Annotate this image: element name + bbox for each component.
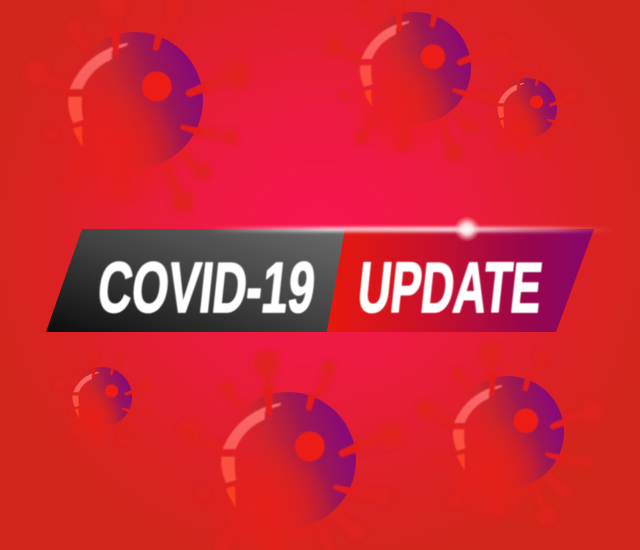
light streak: [205, 227, 615, 232]
virus: bottom right: [417, 341, 603, 527]
virus: small lower left: [53, 348, 153, 448]
virus: top centre-right: [324, 0, 510, 163]
virus: small top right: [478, 59, 578, 159]
lens flare: [454, 216, 480, 242]
banner right panel: red to purple: [327, 229, 594, 332]
virus: top left: [24, 0, 251, 216]
banner title: COVID-19: COVID-19: [94, 249, 319, 328]
banner: [46, 216, 615, 332]
virus: bottom centre: [177, 350, 404, 550]
banner left panel: dark: [46, 229, 345, 332]
